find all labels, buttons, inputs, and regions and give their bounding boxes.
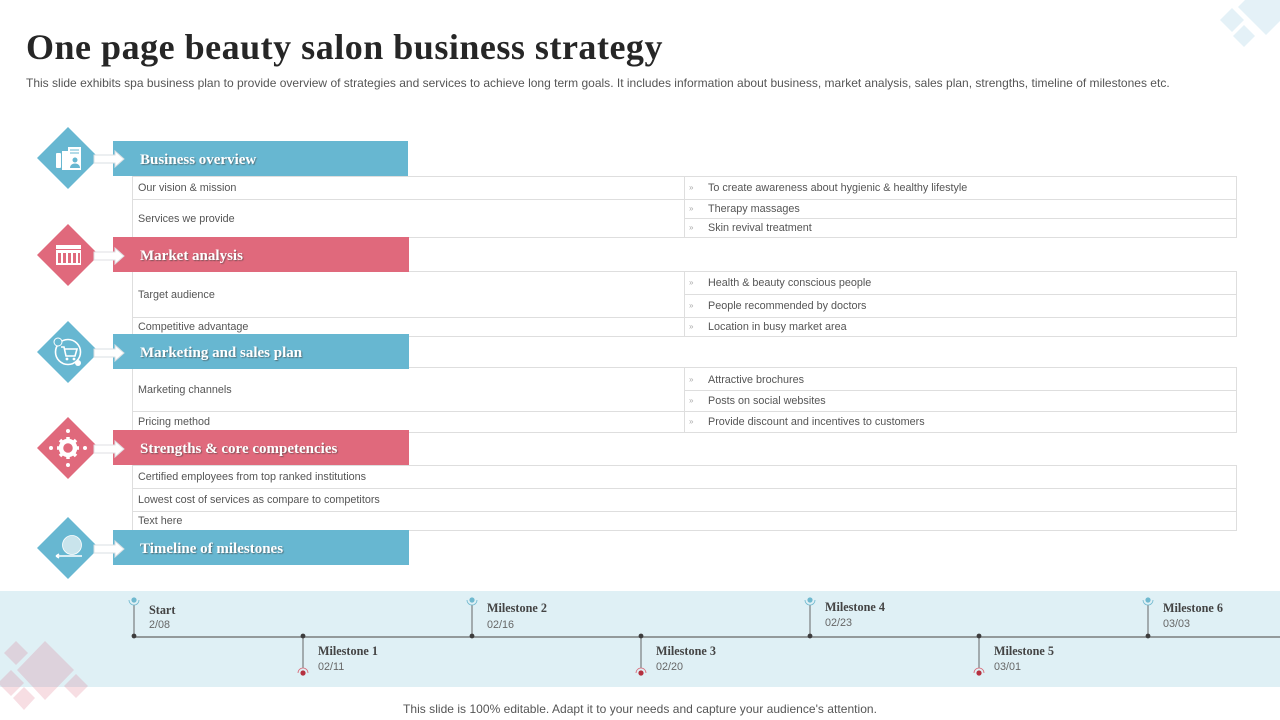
table: marketing and sales plan: Marketing channels (138, 384, 232, 396)
table: marketing and sales plan: Attractive brochures (708, 374, 804, 386)
table: marketing and sales plan: » (689, 375, 693, 384)
milestone: 1 (318, 644, 378, 673)
table: strengths and core competencies: Lowest cost of services as compare to competitors (138, 494, 380, 506)
milestone: 4: Milestone 4 (825, 600, 885, 614)
table: market analysis: » (689, 301, 693, 310)
milestone: 3 (656, 644, 716, 673)
table: marketing and sales plan (132, 367, 1237, 433)
timeline chart (128, 597, 1280, 676)
table: business overview: Services we provide (138, 213, 235, 225)
icon: market analysis diamond (37, 224, 125, 286)
table: market analysis: » (689, 278, 693, 287)
milestone: 2 (487, 601, 547, 631)
banner: marketing and sales plan (113, 334, 409, 369)
table: market analysis: Competitive advantage (138, 321, 248, 333)
table: business overview: To create awareness about hygienic & healthy lifestyle (708, 182, 967, 194)
table: business overview: » (689, 204, 693, 213)
milestone: 6: Milestone 6 (1163, 601, 1223, 615)
table: market analysis: Location in busy market area (708, 321, 847, 333)
table: market analysis: Health & beauty conscious people (708, 277, 871, 289)
milestone: 5 (994, 644, 1054, 673)
table: strengths and core competencies: Text here (138, 515, 182, 527)
table: business overview: Skin revival treatment (708, 222, 812, 234)
banner: timeline of milestones (113, 530, 409, 565)
milestone: start (149, 603, 176, 631)
icon: timeline diamond (37, 517, 125, 579)
table: business overview: Therapy massages (708, 203, 800, 215)
table: strengths and core competencies (132, 465, 1237, 531)
banner: marketing and sales plan: Marketing and sales plan (140, 345, 302, 361)
milestone: 3: Milestone 3 (656, 644, 716, 658)
icon: strengths diamond (37, 417, 125, 479)
table: business overview (132, 176, 1237, 238)
table: market analysis: People recommended by doctors (708, 300, 866, 312)
banner: market analysis: Market analysis (140, 248, 243, 264)
table: market analysis: » (689, 322, 693, 331)
subtitle: This slide exhibits spa business plan to provide overview of strategies and services to achieve long term goals. It includes information about business, market analysis, sales plan, strengths, timeline of milestones etc. (26, 76, 1170, 90)
table: market analysis (132, 271, 1237, 337)
table: marketing and sales plan: Pricing method (138, 416, 210, 428)
milestone: 5: Milestone 5 (994, 644, 1054, 658)
milestone: 1: Milestone 1 (318, 644, 378, 658)
banner: timeline of milestones: Timeline of milestones (140, 541, 283, 557)
milestone: 6: 03/03 (1163, 618, 1190, 630)
milestone: start: Start (149, 603, 175, 617)
table: market analysis: Target audience (138, 289, 215, 301)
table: marketing and sales plan: Provide discount and incentives to customers (708, 416, 925, 428)
decoration: bottom left diamonds (0, 641, 88, 710)
milestone: 5: 03/01 (994, 661, 1021, 673)
table: marketing and sales plan: » (689, 396, 693, 405)
table: marketing and sales plan: » (689, 417, 693, 426)
table: business overview: Our vision & mission (138, 182, 236, 194)
icon: marketing diamond (37, 321, 125, 383)
milestone: 4 (825, 600, 885, 629)
milestone: start: 2/08 (149, 619, 170, 631)
milestone: 2: Milestone 2 (487, 601, 547, 615)
milestone: 1: 02/11 (318, 661, 344, 673)
table: marketing and sales plan: Posts on social websites (708, 395, 826, 407)
banner: market analysis (113, 237, 409, 272)
decoration: top right diamonds (1220, 0, 1280, 47)
footer note: This slide is 100% editable. Adapt it to your needs and capture your audience's attention. (403, 702, 877, 716)
icon: business overview diamond (37, 127, 125, 189)
banner: strengths and core competencies: Strengths & core competencies (140, 441, 337, 457)
milestone: 6 (1163, 601, 1223, 630)
banner: business overview (113, 141, 408, 176)
banner: strengths and core competencies (113, 430, 409, 465)
table: business overview: » (689, 223, 693, 232)
table: strengths and core competencies: Certified employees from top ranked institutions (138, 471, 366, 483)
milestone: 2: 02/16 (487, 619, 514, 631)
decoration: timeline band (0, 591, 1280, 687)
table: business overview: » (689, 183, 693, 192)
milestone: 4: 02/23 (825, 617, 852, 629)
milestone: 3: 02/20 (656, 661, 683, 673)
title: One page beauty salon business strategy (26, 27, 663, 67)
banner: business overview: Business overview (140, 152, 256, 168)
